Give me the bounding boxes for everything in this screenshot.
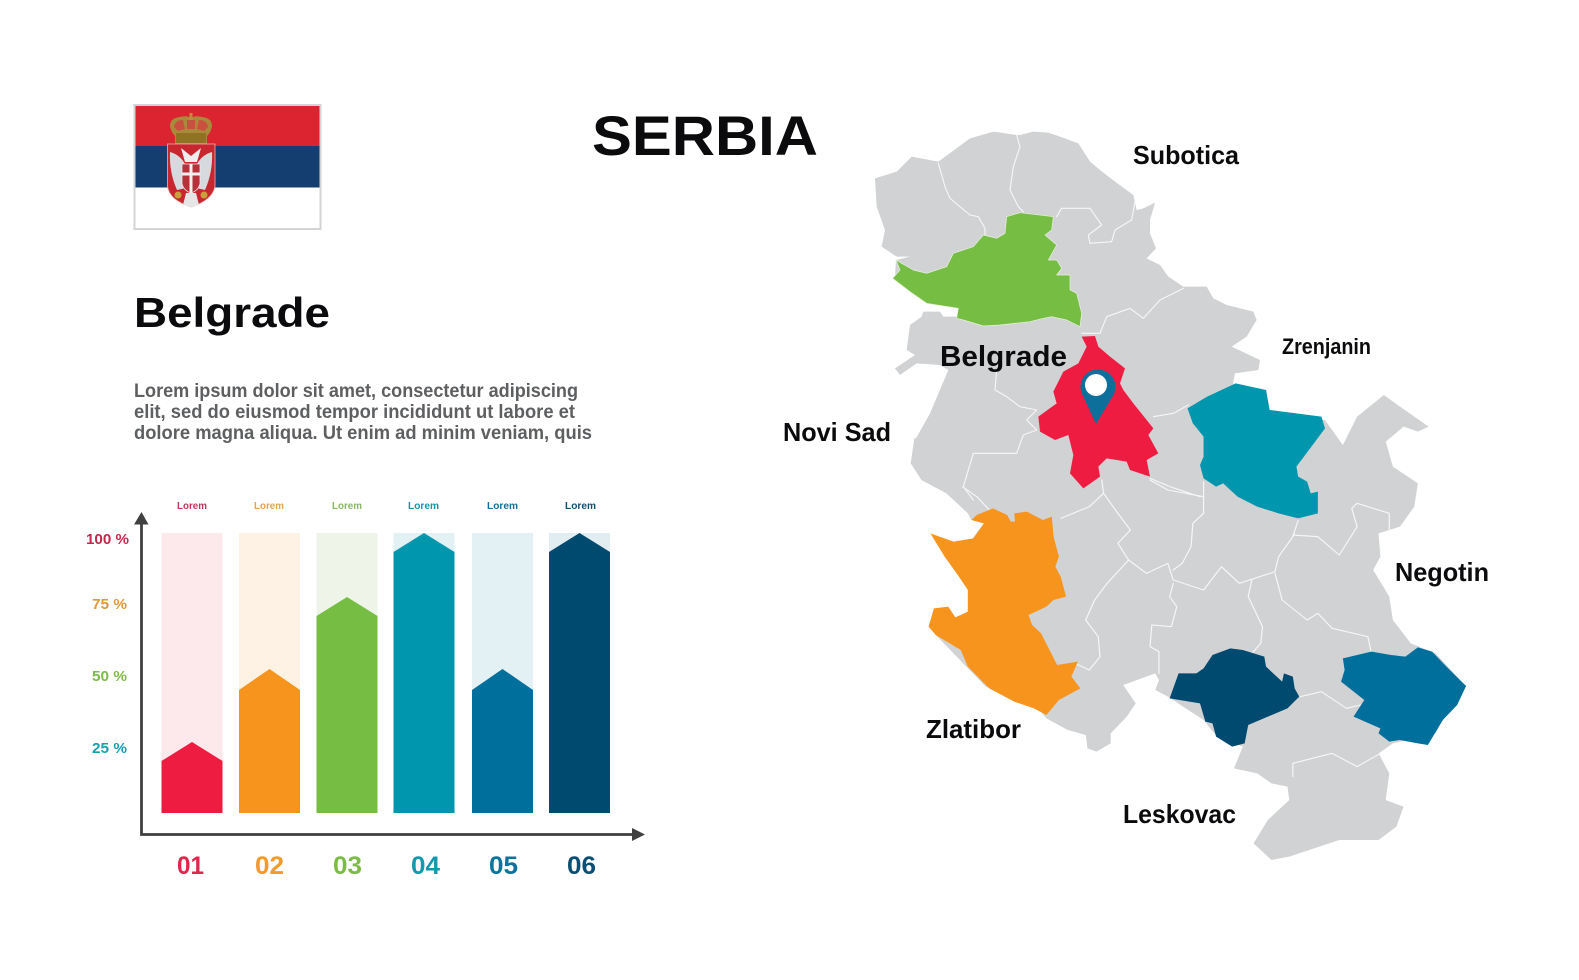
y axis labels: 25 % bbox=[92, 740, 127, 757]
region: blue bbox=[1341, 647, 1466, 745]
label: Leskovac: Leskovac bbox=[1123, 799, 1236, 829]
y axis labels: 50 % bbox=[92, 668, 127, 685]
icon: coat of arms shield bbox=[168, 144, 215, 207]
bar 01: Lorem bbox=[177, 501, 207, 512]
bar 01 bbox=[162, 501, 222, 880]
heading: Belgrade: Belgrade bbox=[134, 289, 330, 336]
map of Serbia bbox=[875, 132, 1466, 860]
body text: elit, sed do eiusmod tempor incididunt ut labore et bbox=[134, 402, 576, 423]
y axis labels bbox=[86, 531, 129, 757]
bar 01: 01 bbox=[177, 852, 204, 880]
bar 04: Lorem bbox=[408, 501, 439, 512]
label: Zlatibor: Zlatibor bbox=[926, 714, 1021, 744]
map labels bbox=[783, 140, 1489, 829]
title: SERBIA bbox=[592, 104, 818, 167]
bar 04: 04 bbox=[411, 852, 440, 880]
bar 06: Lorem bbox=[565, 501, 596, 512]
bar 06: 06 bbox=[567, 852, 596, 880]
bar 03 bbox=[316, 501, 378, 880]
region: green bbox=[893, 213, 1082, 327]
label: Belgrade: Belgrade bbox=[940, 341, 1067, 373]
label: Novi Sad: Novi Sad bbox=[783, 417, 891, 447]
axes bbox=[134, 512, 645, 841]
region: teal bbox=[1187, 383, 1325, 518]
region: orange bbox=[929, 508, 1080, 715]
icon: location pin bbox=[1080, 369, 1116, 424]
label: Negotin: Negotin bbox=[1395, 557, 1489, 587]
bar 02 bbox=[239, 501, 300, 880]
label: Zrenjanin: Zrenjanin bbox=[1282, 334, 1371, 359]
label: Subotica: Subotica bbox=[1133, 140, 1240, 170]
bar 05: Lorem bbox=[487, 501, 518, 512]
body text: Lorem ipsum dolor sit amet, consectetur adipiscing bbox=[134, 381, 578, 402]
bar chart bbox=[86, 501, 645, 880]
region: navy bbox=[1170, 648, 1299, 747]
bar 04 bbox=[394, 501, 454, 880]
bar 03: 03 bbox=[333, 852, 362, 880]
y axis labels: 75 % bbox=[92, 596, 127, 613]
flag of Serbia bbox=[134, 105, 320, 229]
body text: dolore magna aliqua. Ut enim ad minim veniam, quis bbox=[134, 423, 592, 444]
bar 06 bbox=[549, 501, 610, 880]
y axis labels: 100 % bbox=[86, 531, 129, 548]
bar 02: Lorem bbox=[254, 501, 284, 512]
region: red (Belgrade) bbox=[1038, 336, 1158, 488]
bar 05: 05 bbox=[489, 852, 518, 880]
bar 02: 02 bbox=[255, 852, 284, 880]
icon: crown bbox=[170, 113, 212, 144]
bar 03: Lorem bbox=[332, 501, 362, 512]
grey country base bbox=[875, 132, 1460, 860]
internal region borders bbox=[938, 135, 1389, 777]
body text bbox=[134, 381, 592, 444]
bar 05 bbox=[472, 501, 533, 880]
